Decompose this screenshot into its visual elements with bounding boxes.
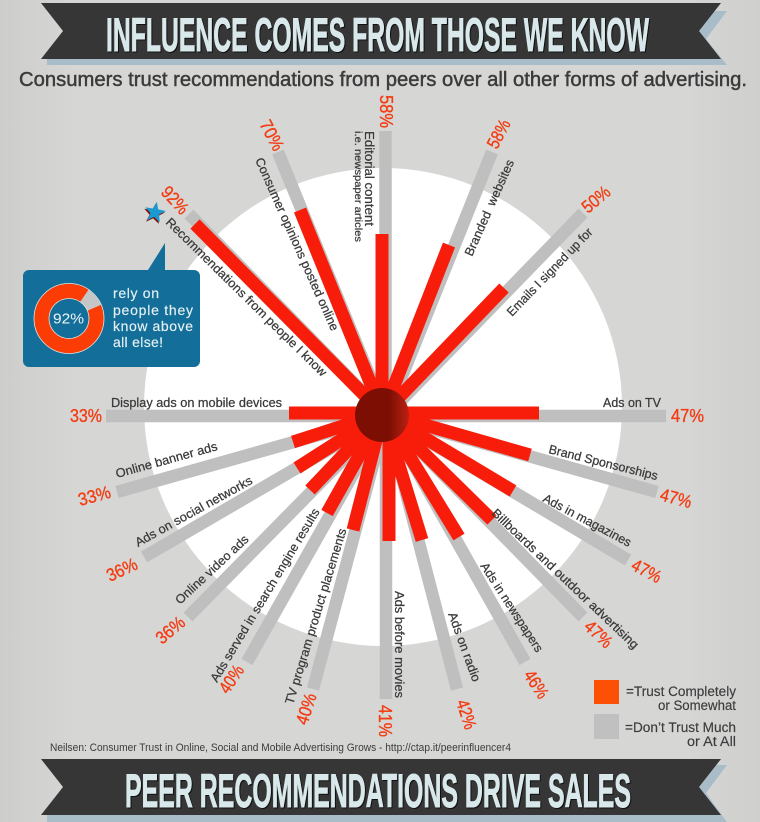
legend: trust text [626,684,736,713]
legend: trust swatch [594,680,619,704]
donut chart 92%: 92% [53,310,84,328]
label: billboards: Billboards and outdoor advertising [489,506,642,652]
label: recommendations: Recommendations from people I know [163,215,330,380]
value: consumer opinions 70%: 70% [255,116,288,154]
value: sponsorships 47%: 47% [658,485,694,512]
label: emails: Emails I signed up for [504,225,595,319]
value: newspapers 46%: 46% [520,666,553,702]
spoke labels [111,131,662,706]
label: consumer opinions: Consumer opinions posted online [252,156,342,333]
value: emails 50%: 50% [578,182,614,217]
legend: distrust text: =Don’t Trust Much [625,720,736,735]
label: ads in newspapers: Ads in newspapers [477,560,546,655]
value: tv program 40%: 40% [292,691,321,727]
gray bars: don't trust [106,131,666,699]
legend: trust text: or Somewhat [658,698,736,713]
label: search ads: Ads served in search engine results [208,506,323,685]
value: radio 42%: 42% [452,697,480,732]
label: ads on radio: Ads on radio [445,610,483,684]
value: magazines 47%: 47% [628,555,665,587]
value: recommendations 92%: 92% [157,182,193,218]
label: tv product placements: TV program product placements [282,527,349,706]
label: newspaper articles note: i.e. newspaper articles [352,131,364,242]
label: ads before movies: Ads before movies [392,591,406,698]
percent values [70,95,704,737]
label: display ads: Display ads on mobile devices [111,396,282,410]
bottom banner [41,759,727,822]
legend: distrust text [625,720,736,749]
label: social network ads: Ads on social networks [133,473,255,550]
value: video 36%: 36% [152,612,189,648]
central hub [355,388,409,442]
source note: Neilsen: Consumer Trust in Online, Social and Mobile Advertising Grows - http://ctap.it/peerinfluencer4 [50,742,511,754]
value: billboards 47%: 47% [580,616,617,652]
value: display 33%: 33% [70,406,102,426]
top banner [41,3,727,65]
radial chart [70,95,704,737]
value: tv 47%: 47% [671,406,704,426]
icon: star [144,202,166,224]
callout [23,243,200,367]
value: movies 41%: 41% [375,705,395,737]
label: brand sponsorships: Brand Sponsorships [547,442,659,483]
legend: distrust text: or At All [687,734,736,749]
red bars: trust [195,210,539,541]
subtitle: Consumers trust recommendations from peers over all other forms of advertising. [19,69,747,91]
label: online video ads: Online video ads [172,532,252,607]
label: online banner ads: Online banner ads [114,439,219,481]
value: banner 33%: 33% [76,482,113,510]
donut chart 92% [34,284,104,354]
value: branded 58%: 58% [483,116,515,152]
callout text: rely on [113,285,159,301]
value: search 40%: 40% [215,661,248,697]
callout text: know above [113,318,193,334]
callout text: all else! [113,334,163,350]
label: branded websites: Branded websites [462,158,517,258]
label: ads in magazines: Ads in magazines [541,491,634,550]
legend: trust text: =Trust Completely [626,684,736,699]
callout text: people they [113,302,193,318]
value: editorial 58%: 58% [376,95,396,128]
callout text [113,285,193,350]
legend: distrust swatch [594,714,619,739]
legend [594,680,736,749]
label: ads on tv: Ads on TV [603,396,662,410]
label: editorial content: Editorial content [362,131,376,227]
white circle backdrop [144,168,622,646]
value: social 36%: 36% [103,554,141,586]
